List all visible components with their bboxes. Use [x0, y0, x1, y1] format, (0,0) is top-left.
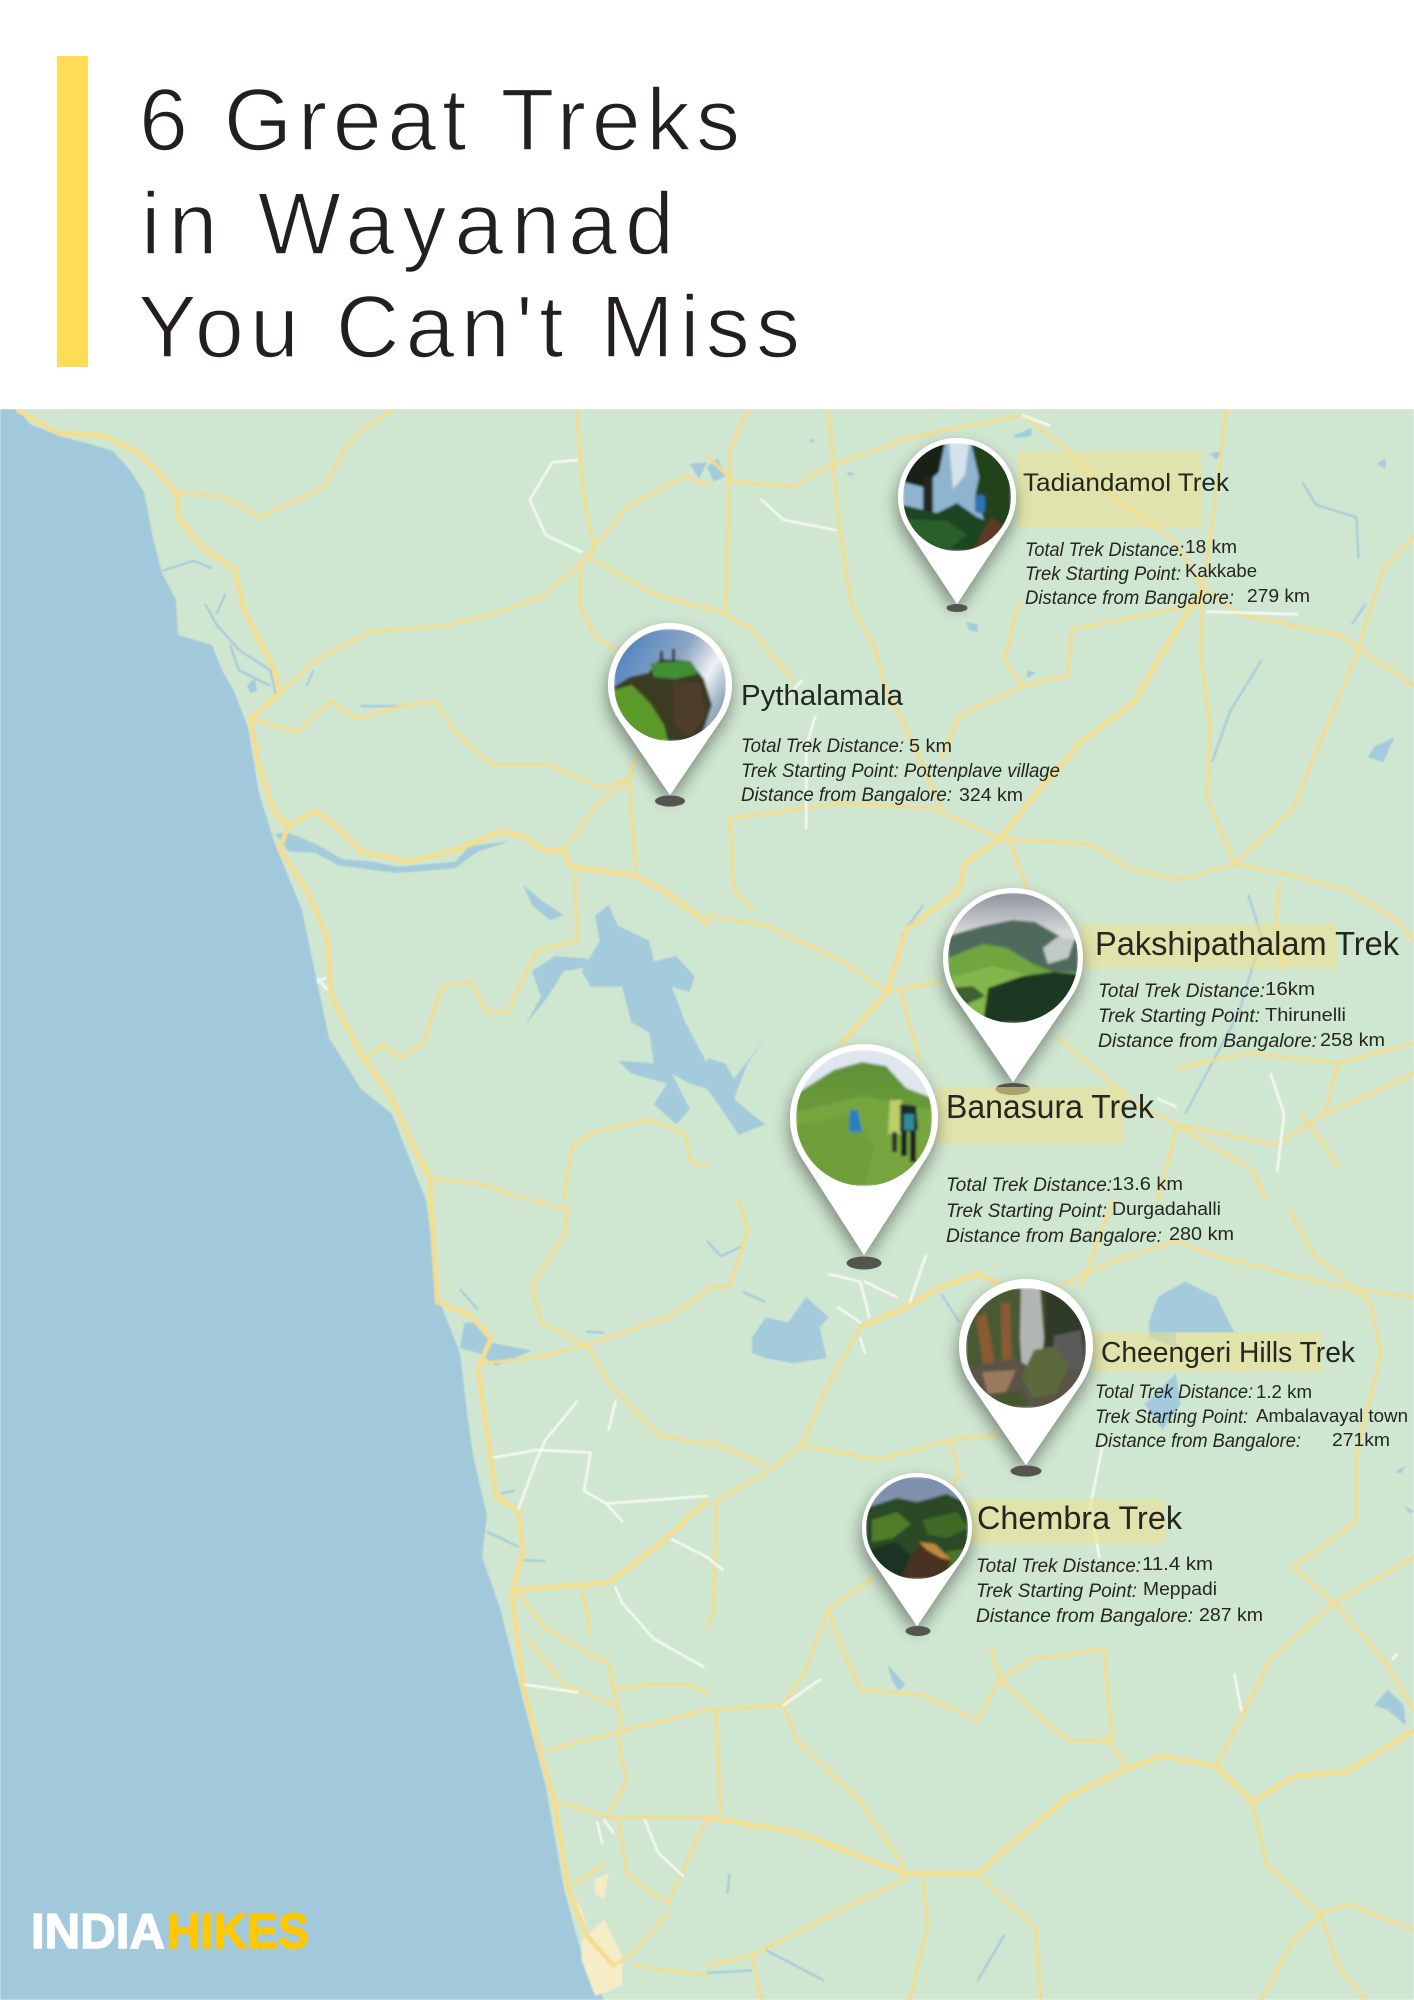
label highlight: Tadiandamol: [1017, 451, 1202, 528]
details: Tadiandamol: Kakkabe: [1185, 560, 1257, 581]
details: Chembra: Trek Starting Point:: [976, 1581, 1137, 1602]
details: Chembra: 11.4 km: [1142, 1553, 1213, 1574]
details: Tadiandamol: 18 km: [1185, 536, 1237, 557]
details: Pakshipathalam: Trek Starting Point:: [1098, 1006, 1260, 1027]
details: Pakshipathalam: Total Trek Distance:: [1098, 981, 1265, 1002]
heading: Pythalamala: Pythalamala: [741, 680, 904, 712]
pin: Chembra: [862, 1473, 972, 1636]
details: Banasura: Trek Starting Point:: [946, 1201, 1107, 1222]
details: Chembra: Meppadi: [1143, 1578, 1217, 1599]
marker: Pakshipathalam Trek: [943, 888, 1399, 1095]
logo: Indiahikes: INDIA: [31, 1905, 165, 1959]
details: Chembra: [976, 1553, 1263, 1627]
details: Cheengeri: Trek Starting Point:: [1095, 1407, 1248, 1428]
details: Pakshipathalam: Distance from Bangalore:: [1098, 1031, 1317, 1052]
label highlight: Chembra: [968, 1499, 1165, 1544]
pin: Banasura: [790, 1044, 938, 1270]
heading: Banasura Trek: Banasura Trek: [946, 1088, 1154, 1125]
pin: Cheengeri: [959, 1279, 1093, 1476]
details: Cheengeri: [1095, 1381, 1408, 1452]
pin: Pythalamala: [608, 623, 732, 806]
details: Pythalamala: Trek Starting Point: Pottenplave village: [741, 761, 1060, 782]
label highlight: Pakshipathalam: [1081, 924, 1337, 969]
details: Tadiandamol: Distance from Bangalore:: [1025, 588, 1234, 609]
details: Pythalamala: 324 km: [959, 784, 1023, 805]
marker: Chembra Trek: [862, 1473, 1263, 1636]
header background: [0, 0, 1414, 409]
details: Cheengeri: Total Trek Distance:: [1095, 1382, 1253, 1403]
details: Cheengeri: 1.2 km: [1256, 1381, 1312, 1402]
marker: Pythalamala: [608, 623, 1060, 806]
pin: Tadiandamol: [898, 438, 1016, 612]
details: Tadiandamol: 279 km: [1247, 585, 1310, 606]
marker: Tadiandamol Trek: [898, 438, 1310, 612]
details: Banasura: Durgadahalli: [1112, 1198, 1221, 1219]
heading: Pakshipathalam Trek: Pakshipathalam Trek: [1095, 925, 1399, 962]
logo: Indiahikes: [31, 1905, 309, 1959]
details: Chembra: 287 km: [1199, 1604, 1263, 1625]
marker: Cheengeri Hills Trek: [959, 1279, 1408, 1476]
details: Chembra: Total Trek Distance:: [976, 1556, 1141, 1577]
label highlight: Banasura: [937, 1087, 1124, 1144]
details: Pythalamala: 5 km: [909, 735, 952, 756]
details: Pythalamala: [741, 735, 1060, 806]
details: Pythalamala: Distance from Bangalore:: [741, 785, 952, 806]
details: Pythalamala: Total Trek Distance:: [741, 736, 904, 757]
details: Chembra: Distance from Bangalore:: [976, 1606, 1193, 1627]
label highlight: Cheengeri: [1093, 1332, 1322, 1372]
accent bar: [57, 56, 88, 367]
details: Tadiandamol: Total Trek Distance:: [1025, 540, 1184, 561]
details: Tadiandamol: Trek Starting Point:: [1025, 564, 1181, 585]
title: in Wayanad: [141, 174, 674, 273]
details: Cheengeri: 271km: [1332, 1429, 1390, 1450]
map: [0, 409, 1414, 2000]
details: Tadiandamol: [1025, 536, 1310, 609]
title: You Can't Miss: [138, 277, 800, 376]
logo: Indiahikes: HIKES: [167, 1905, 309, 1959]
details: Pakshipathalam: 258 km: [1320, 1029, 1385, 1050]
details: Pakshipathalam: Thirunelli: [1265, 1004, 1346, 1025]
details: Banasura: Distance from Bangalore:: [946, 1226, 1162, 1247]
marker: Banasura Trek: [790, 1044, 1234, 1270]
heading: Chembra Trek: Chembra Trek: [977, 1500, 1183, 1536]
details: Banasura: 13.6 km: [1112, 1173, 1183, 1194]
title: [138, 70, 800, 376]
pin: Pakshipathalam: [943, 888, 1083, 1095]
details: Pakshipathalam: [1098, 978, 1385, 1052]
title: 6 Great Treks: [139, 70, 740, 169]
details: Banasura: [946, 1173, 1234, 1247]
details: Cheengeri: Ambalavayal town: [1256, 1405, 1408, 1426]
heading: Tadiandamol Trek: Tadiandamol Trek: [1023, 469, 1230, 497]
details: Cheengeri: Distance from Bangalore:: [1095, 1431, 1301, 1452]
details: Pakshipathalam: 16km: [1265, 978, 1315, 999]
heading: Cheengeri Hills Trek: Cheengeri Hills Trek: [1101, 1337, 1355, 1369]
details: Banasura: 280 km: [1169, 1223, 1234, 1244]
details: Banasura: Total Trek Distance:: [946, 1175, 1112, 1196]
